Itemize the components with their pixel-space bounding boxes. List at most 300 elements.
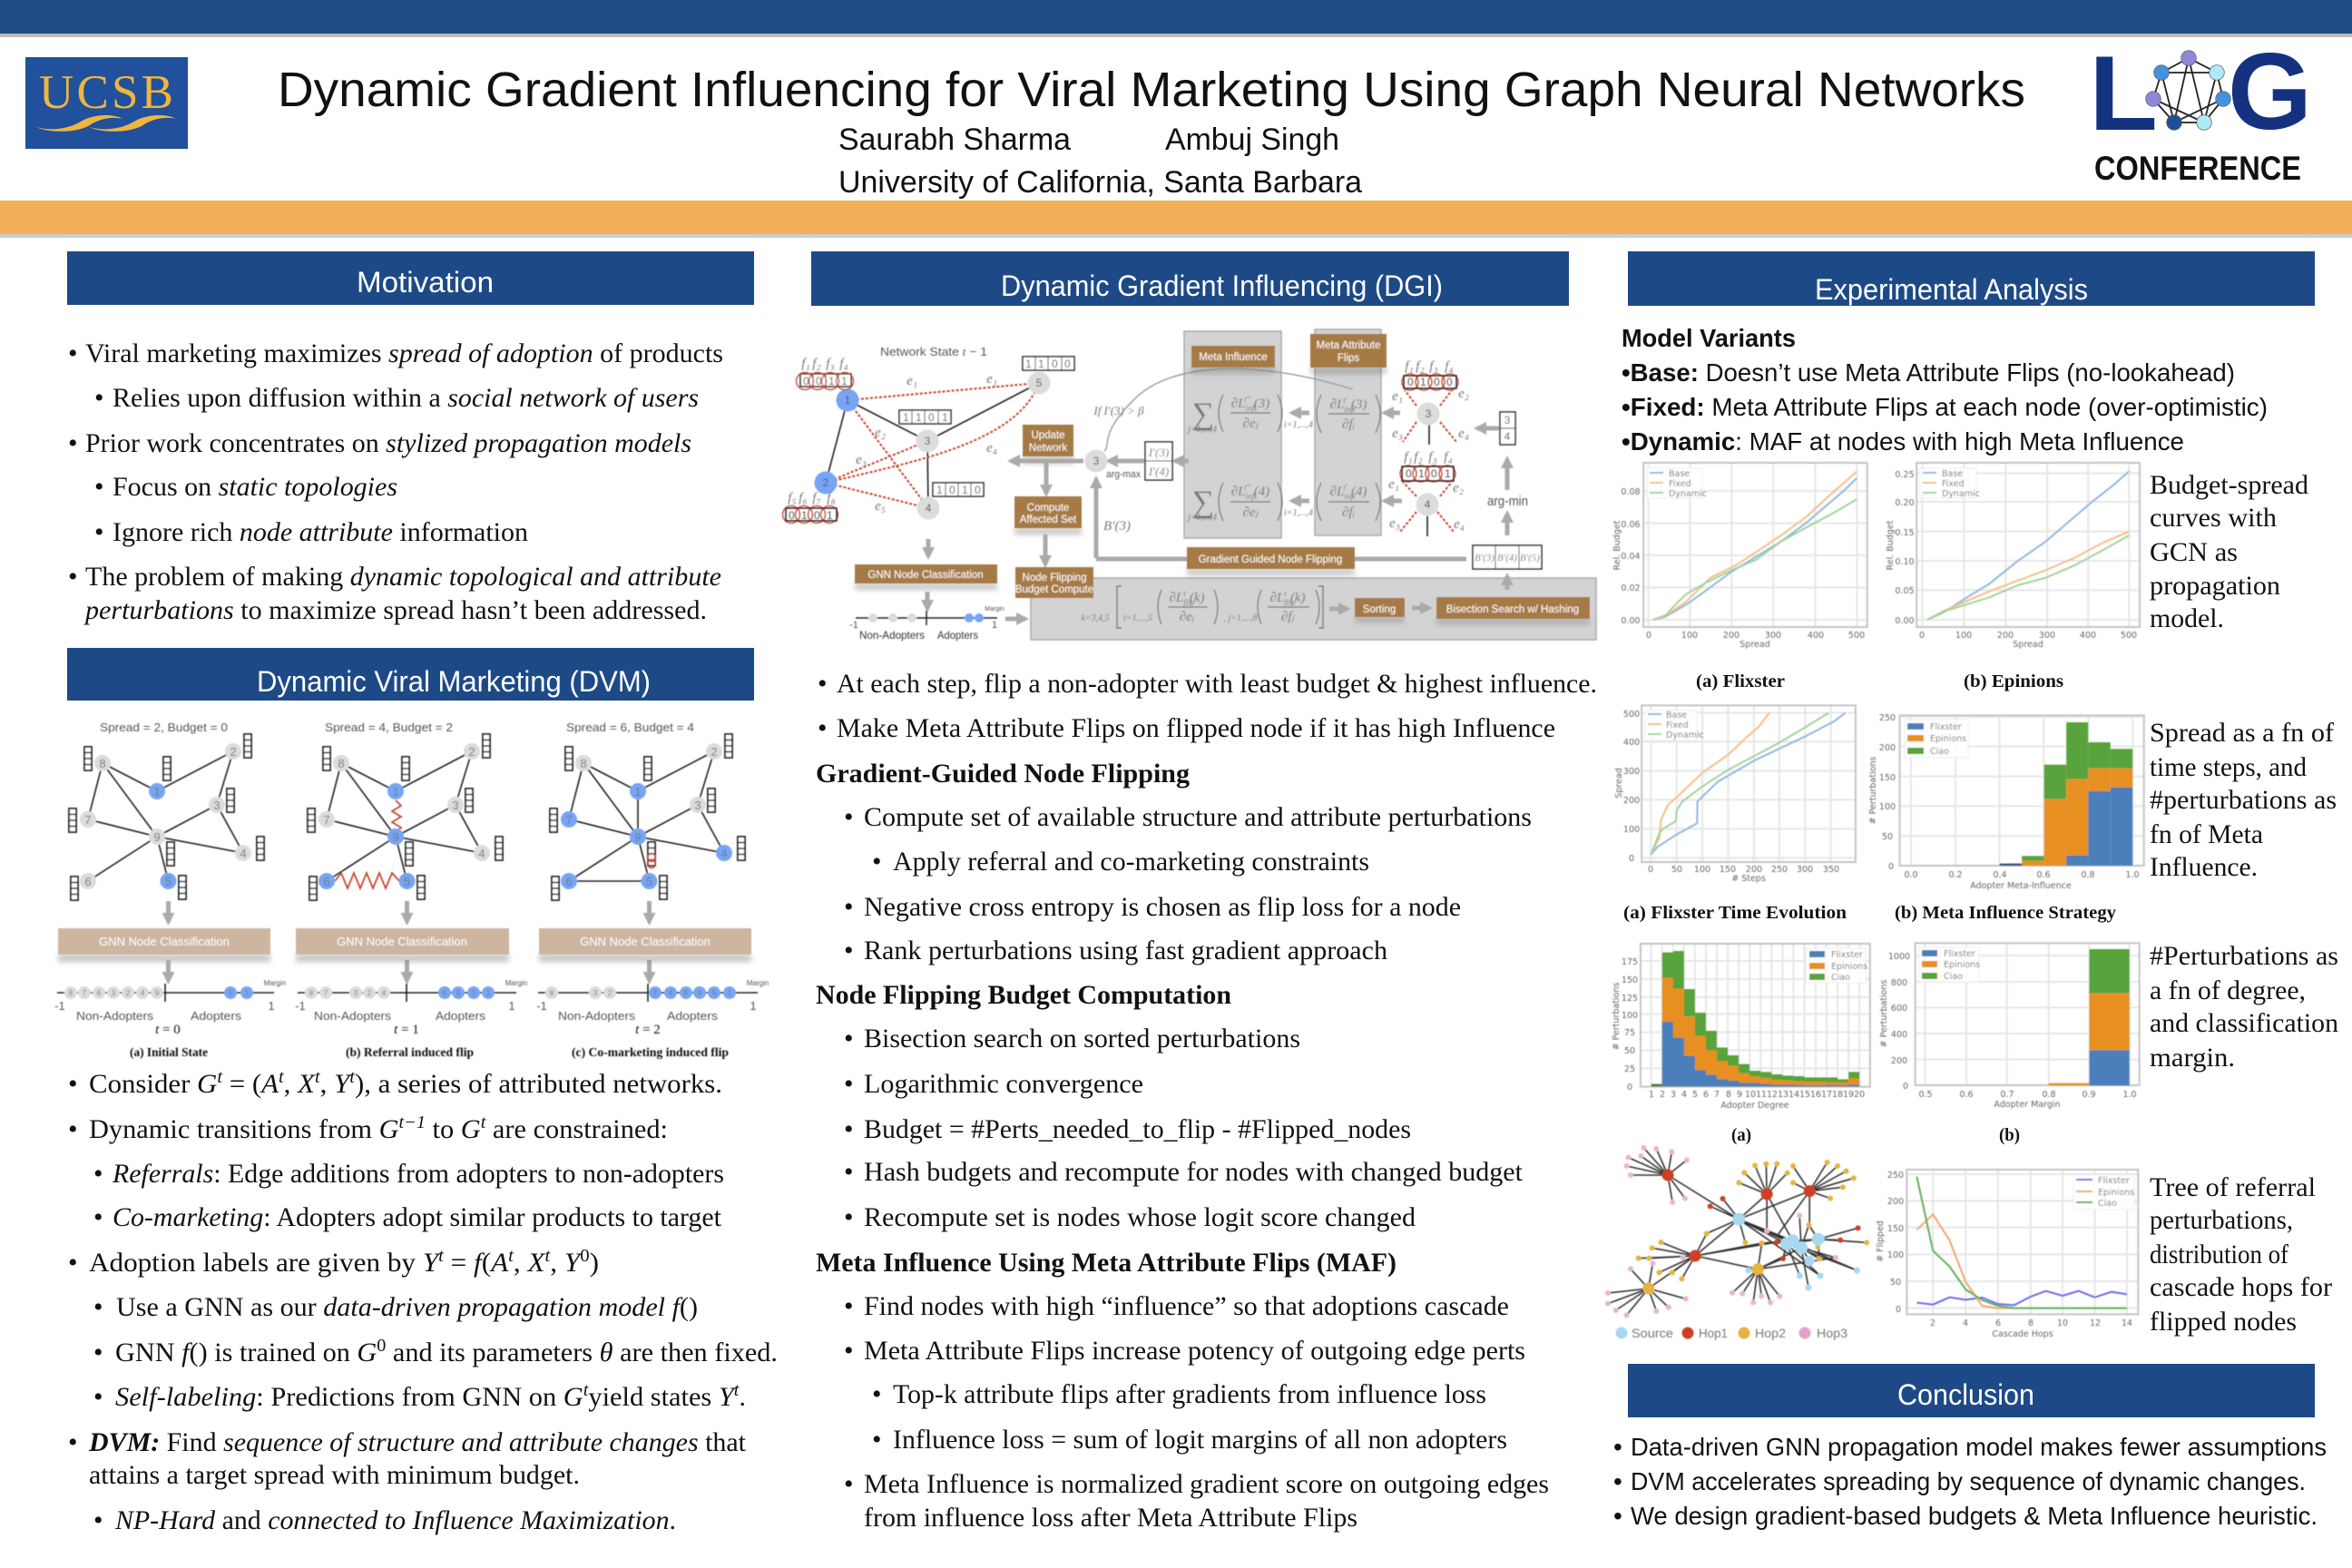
chart: cascade hops line chart: 12 xyxy=(2090,1318,2101,1328)
sub-figure: initial state: 9 xyxy=(153,830,161,844)
sub-figure: co-marketing induced flip: 9 xyxy=(634,830,642,844)
chart: meta influence strategy histogram: Epinions xyxy=(1930,734,1966,744)
chart: referral tree network: Hop2 xyxy=(1755,1326,1786,1340)
text block: motivation bullets: • xyxy=(94,517,104,547)
gradient guided flipping and budget row: ∂L xyxy=(1170,591,1183,605)
text block: DGI steps: Top-k attribute flips after gradients from influence loss xyxy=(893,1379,1486,1409)
text block: DVM bullets: θ are then fixed. xyxy=(600,1338,776,1367)
right-side candidate nodes: f₂ xyxy=(1414,450,1423,465)
text block: conclusion bullets: We design gradient-based budgets & Meta Influence heuristic. xyxy=(1631,1502,2318,1530)
right-side candidate nodes: 4 xyxy=(1504,430,1511,443)
sub-figure: referral induced flip: 5 xyxy=(472,989,476,997)
chart: perturbations by adopter degree: # Perturbations xyxy=(1612,983,1622,1050)
sub-figure: initial state: 4 xyxy=(240,847,247,860)
text block: DVM bullets: to xyxy=(426,1114,461,1144)
meta influence and attribute columns: t″ xyxy=(1245,395,1250,404)
chart: Flixster budget-spread: 0 xyxy=(1646,631,1651,641)
text block: DVM bullets: • xyxy=(93,1505,103,1535)
text block: DGI steps: Meta Influence is normalized gradient score on outgoing edges xyxy=(864,1469,1549,1499)
text block: DVM bullets: are constrained: xyxy=(485,1114,668,1144)
chart: Epinions budget-spread: Dynamic xyxy=(1942,489,1980,499)
GNN node classification and margin line: Adopters xyxy=(937,629,978,642)
update network and budget pipeline: Update xyxy=(1031,430,1065,441)
panel header: Dynamic Gradient Influencing: Dynamic Gradient Influencing (DGI) xyxy=(1001,270,1443,302)
text block: DVM bullets: Dynamic transitions from G xyxy=(89,1114,398,1144)
logo: LoG conference: G xyxy=(2228,31,2312,152)
chart: meta influence strategy histogram xyxy=(1868,713,2144,891)
text block: DVM bullets: f(A xyxy=(474,1248,507,1278)
meta influence and attribute columns: ∂L xyxy=(1231,485,1245,499)
text block: DVM bullets: t xyxy=(217,1067,223,1087)
network state graph: 1010 xyxy=(936,484,981,496)
sub-figure: initial state: 4 xyxy=(141,989,145,997)
chart: Epinions budget-spread: 300 xyxy=(2039,631,2055,641)
sub-figure: co-marketing induced flip: 2 xyxy=(608,989,612,997)
chart: Epinions budget-spread: Rel. Budget xyxy=(1886,520,1896,570)
sub-figure: initial state xyxy=(54,720,286,1060)
right-side candidate nodes: 3 xyxy=(1426,407,1432,420)
chart: perturbations by adopter margin: 1000 xyxy=(1888,952,1910,962)
side note: budget-spread curves: curves with xyxy=(2150,503,2277,533)
chart: perturbations by adopter degree: 14 xyxy=(1788,1090,1799,1100)
chart: perturbations by adopter degree: Ciao xyxy=(1831,973,1850,983)
text block: motivation bullets: • xyxy=(94,472,104,502)
chart: cascade hops line chart: 8 xyxy=(2028,1318,2034,1328)
network state graph: e₂ xyxy=(875,426,886,440)
text block: DGI steps: Apply referral and co-marketing constraints xyxy=(893,847,1369,877)
side note: budget-spread curves: model. xyxy=(2150,603,2224,633)
authors: University of California, Santa Barbara xyxy=(838,165,1362,200)
network state graph: Network State t − 1 xyxy=(880,345,987,358)
chart: referral tree network: Hop1 xyxy=(1699,1326,1728,1340)
chart: meta influence strategy histogram: 0.6 xyxy=(2036,870,2051,880)
chart: Epinions budget-spread: Fixed xyxy=(1942,479,1965,489)
sub-figure: initial state: (a) Initial State xyxy=(130,1046,208,1060)
text block: DVM bullets: • xyxy=(93,1292,103,1322)
chart: perturbations by adopter margin: 0.5 xyxy=(1918,1090,1933,1100)
text block: DVM bullets: , xyxy=(284,1069,298,1099)
panel header: Motivation xyxy=(67,251,754,305)
chart: Flixster budget-spread: 0.08 xyxy=(1621,487,1641,497)
update network and budget pipeline: If I′(3) > β xyxy=(1093,404,1144,417)
chart: perturbations by adopter margin: 0 xyxy=(1903,1082,1908,1092)
network state graph: e₄ xyxy=(986,441,997,456)
text block: motivation bullets: Focus on static topologies xyxy=(113,472,397,502)
text block: DVM bullets: • xyxy=(68,1069,78,1099)
gradient guided flipping and budget row: Sorting xyxy=(1363,604,1396,615)
chart: Flixster budget-spread: 300 xyxy=(1765,631,1781,641)
text block: DVM bullets: • xyxy=(68,1114,78,1144)
authors xyxy=(838,122,1362,200)
chart: cascade hops line chart: 100 xyxy=(1887,1250,1904,1260)
chart: perturbations by adopter degree: 150 xyxy=(1622,975,1638,985)
side note: referral tree xyxy=(2150,1172,2332,1337)
meta influence and attribute columns: ∂L xyxy=(1231,397,1245,411)
side note: spread over time: Spread as a fn of xyxy=(2150,718,2334,748)
chart: perturbations by adopter margin: 0.8 xyxy=(2042,1090,2056,1100)
text block: DVM bullets xyxy=(68,1067,778,1535)
network state graph: 3 xyxy=(925,435,931,447)
side note: perturbations by degree: and classification xyxy=(2150,1008,2338,1038)
chart: cascade hops line chart: 4 xyxy=(1963,1318,1968,1328)
chart: Flixster budget-spread: Base xyxy=(1669,469,1690,479)
title: Dynamic Gradient Influencing for Viral Marketing Using Graph Neural Networks xyxy=(278,63,2025,117)
text block: DVM bullets: GNN f() is trained on G xyxy=(115,1338,377,1367)
text block: DGI steps: • xyxy=(844,802,854,832)
network state graph: f₂ xyxy=(812,357,821,371)
sub-figure: co-marketing induced flip: 6 xyxy=(684,989,689,997)
sub-figure: referral induced flip: 5 xyxy=(404,875,410,888)
text block: DGI steps: • xyxy=(844,1291,854,1321)
sub-figure: referral induced flip: 1 xyxy=(508,999,515,1013)
text block: model variants: •Dynamic: MAF at nodes with high Meta Influence xyxy=(1622,427,2184,456)
gradient guided flipping and budget row: i=1,...,5 xyxy=(1123,613,1152,623)
meta influence and attribute columns: ∂fᵢ xyxy=(1342,505,1355,520)
sub-figure: initial state: GNN Node Classification xyxy=(99,935,230,948)
grey panels xyxy=(1031,329,1596,640)
sub-figure: co-marketing induced flip: 1 xyxy=(634,785,642,799)
chart: perturbations by adopter degree: 123456789 xyxy=(1649,1090,1742,1100)
network state graph: f₄ xyxy=(839,357,848,371)
panel header: Experimental Analysis xyxy=(1628,251,2315,306)
meta influence and attribute columns: ∂L xyxy=(1330,397,1344,412)
right-side candidate nodes: 3 xyxy=(1504,414,1511,426)
text block: DGI steps: • xyxy=(872,847,882,877)
chart: Flixster time evolution: 200 xyxy=(1623,796,1640,806)
sub-figure: co-marketing induced flip: t = 2 xyxy=(635,1023,661,1037)
text block: DVM bullets: t xyxy=(734,1380,740,1400)
text block: model variants: •Base: Doesn’t use Meta Attribute Flips (no-lookahead) xyxy=(1622,358,2235,387)
sub-figure: co-marketing induced flip: 5 xyxy=(712,989,717,997)
right-side candidate nodes: e₄ xyxy=(1458,426,1469,441)
text block: DVM bullets: , xyxy=(550,1248,564,1278)
chart: perturbations by adopter margin: 400 xyxy=(1891,1030,1907,1040)
gradient guided flipping and budget row: flip xyxy=(1183,598,1195,607)
text block: DGI steps: • xyxy=(844,1202,854,1232)
side note: perturbations by degree xyxy=(2150,941,2338,1073)
update network and budget pipeline: Network xyxy=(1029,443,1067,454)
text block: DGI steps: Meta Attribute Flips increase potency of outgoing edge perts xyxy=(864,1336,1525,1366)
side note: perturbations by degree: #Perturbations as xyxy=(2150,941,2338,971)
network state graph: 2 xyxy=(823,476,829,489)
gradient guided flipping and budget row: B′(3) xyxy=(1475,553,1494,564)
chart: cascade hops line chart: 2 xyxy=(1930,1318,1936,1328)
meta influence and attribute columns: (3) xyxy=(1254,397,1269,411)
sub-figure: initial state: t = 0 xyxy=(155,1023,181,1037)
chart: perturbations by adopter degree: 13 xyxy=(1778,1090,1788,1100)
sub-figure: co-marketing induced flip: 8 xyxy=(580,757,587,770)
text block: model variants: Model Variants xyxy=(1622,324,1796,352)
meta influence and attribute columns: t′ xyxy=(1343,396,1348,405)
sub-figure: initial state: 6 xyxy=(84,875,92,888)
chart: perturbations by adopter degree: 18 xyxy=(1832,1090,1843,1100)
sub-figure: referral induced flip: 4 xyxy=(478,847,485,860)
sub-figure: initial state: 1 xyxy=(245,989,250,997)
update network and budget pipeline: Affected Set xyxy=(1020,514,1077,525)
sub-figure: referral induced flip: -1 xyxy=(295,999,306,1013)
GNN node classification and margin line: 1 xyxy=(992,620,997,631)
text block: DVM bullets: G xyxy=(461,1114,481,1144)
chart: perturbations by adopter margin: 0.7 xyxy=(2000,1090,2014,1100)
meta influence and attribute columns: i=1,...,4 xyxy=(1284,420,1313,430)
meta influence and attribute columns: Flips xyxy=(1338,353,1359,364)
chart: Flixster budget-spread: 100 xyxy=(1681,631,1698,641)
side note: referral tree: distribution of xyxy=(2150,1240,2288,1269)
text block: DGI steps: Influence loss = sum of logit margins of all non adopters xyxy=(893,1425,1507,1455)
chart: perturbations by adopter margin: Epinions xyxy=(1944,960,1980,970)
chart: cascade hops line chart: 250 xyxy=(1887,1171,1904,1181)
sub-figure: initial state: 8 xyxy=(99,757,106,770)
sub-figure: co-marketing induced flip: 1 xyxy=(728,989,732,997)
text block: DGI steps: • xyxy=(844,1469,854,1499)
text block: DVM bullets: NP-Hard and connected to Influence Maximization. xyxy=(114,1505,676,1535)
text block: DVM bullets: and its parameters xyxy=(386,1338,600,1367)
network state graph: e₁ xyxy=(906,374,917,388)
chart: Flixster time evolution: 250 xyxy=(1771,865,1788,875)
chart: meta influence strategy histogram: Flixster xyxy=(1930,722,1962,732)
chart: cascade hops line chart xyxy=(1876,1170,2138,1339)
sub-figure: referral induced flip: t = 1 xyxy=(394,1023,419,1037)
text block: motivation bullets: The problem of making dynamic topological and attribute xyxy=(85,562,721,592)
meta influence and attribute columns: ∑ xyxy=(1192,397,1214,431)
gradient guided flipping and budget row: ∂L xyxy=(1270,591,1284,605)
chart: meta influence strategy histogram: # Perturbations xyxy=(1868,757,1878,824)
figure: DVM three-state diagram xyxy=(54,720,769,1060)
text block: DVM bullets: DVM: Find sequence of structure and attribute changes that xyxy=(88,1427,747,1457)
panel header: Conclusion xyxy=(1628,1364,2315,1417)
panel header: Experimental Analysis: Experimental Analysis xyxy=(1815,273,2088,306)
right-side candidate nodes: f₄ xyxy=(1444,450,1453,465)
sub-figure: co-marketing induced flip: 5 xyxy=(646,875,652,888)
chart: Epinions budget-spread: Spread xyxy=(2013,640,2043,650)
text block: motivation bullets xyxy=(68,338,723,625)
text block: DVM bullets: • xyxy=(68,1248,78,1278)
text block: DVM bullets: t xyxy=(349,1067,355,1087)
chart: Flixster time evolution: 200 xyxy=(1746,865,1762,875)
side note: referral tree: Tree of referral xyxy=(2150,1172,2316,1202)
sub-figure: co-marketing induced flip: 4 xyxy=(669,989,673,997)
chart: referral tree network xyxy=(1608,1148,1867,1340)
heading: gradient-guided node flipping: Gradient-Guided Node Flipping xyxy=(816,759,1190,789)
gradient guided flipping and budget row: (k) xyxy=(1190,591,1204,605)
right-side candidate nodes: f₃ xyxy=(1428,450,1437,465)
text block: DGI steps: • xyxy=(844,892,854,922)
right-side candidate nodes: e₃ xyxy=(1389,516,1400,531)
right-side candidate nodes: 4 xyxy=(1425,498,1431,511)
update network and budget pipeline: Budget Compute xyxy=(1015,584,1093,595)
right-side candidate nodes: e₂ xyxy=(1453,481,1464,495)
text block: DGI steps: Compute set of available structure and attribute perturbations xyxy=(864,802,1532,832)
text block: DVM bullets: • xyxy=(93,1159,103,1189)
GNN node classification and margin line: GNN Node Classification xyxy=(867,570,984,581)
captions: first chart row xyxy=(1696,671,2063,691)
text block: DVM bullets: • xyxy=(93,1338,103,1367)
sub-figure: initial state: -1 xyxy=(54,999,65,1013)
sub-figure: initial state: 7 xyxy=(84,813,92,827)
chart: cascade hops line chart: Ciao xyxy=(2098,1199,2117,1209)
sub-figure: referral induced flip: 7 xyxy=(324,989,328,997)
chart: referral tree network: Hop3 xyxy=(1817,1326,1847,1340)
update network and budget pipeline: I′(3) xyxy=(1148,446,1169,459)
chart: perturbations by adopter margin: 800 xyxy=(1891,978,1907,988)
chart: Flixster time evolution: Fixed xyxy=(1666,720,1689,730)
GNN node classification and margin line: -1 xyxy=(849,620,858,631)
sub-figure: referral induced flip: 6 xyxy=(323,875,330,888)
chart: perturbations by adopter degree: 20 xyxy=(1854,1090,1865,1100)
chart: cascade hops line chart: 6 xyxy=(1995,1318,2001,1328)
chart: Flixster time evolution: Spread xyxy=(1614,768,1624,799)
text block: DVM bullets: Y xyxy=(564,1248,583,1278)
gradient guided flipping and budget row: , j=1,...,8 xyxy=(1223,613,1258,623)
logo: LoG conference: CONFERENCE xyxy=(2094,150,2301,187)
network state graph: e₃ xyxy=(856,453,867,467)
sub-figure: co-marketing induced flip: Non-Adopters xyxy=(558,1009,636,1023)
chart: perturbations by adopter degree: 16 xyxy=(1810,1090,1821,1100)
update network and budget pipeline: I′(4) xyxy=(1148,465,1169,478)
gradient guided flipping and budget row: flip xyxy=(1284,598,1296,607)
chart: perturbations by adopter degree: 17 xyxy=(1821,1090,1832,1100)
meta influence and attribute columns: (4) xyxy=(1254,485,1269,499)
panel header: Motivation: Motivation xyxy=(357,266,494,299)
right-side candidate nodes: e₁ xyxy=(1388,477,1399,492)
side note: budget-spread curves: propagation xyxy=(2150,571,2280,601)
text block: DGI steps: • xyxy=(844,1336,854,1366)
text block: conclusion bullets xyxy=(1613,1433,2327,1530)
chart: Flixster time evolution: 100 xyxy=(1623,825,1640,835)
captions: first chart row: (b) Epinions xyxy=(1964,671,2063,691)
sub-figure: referral induced flip: 3 xyxy=(354,989,358,997)
text block: DVM bullets: 0 xyxy=(377,1336,386,1356)
text block: conclusion bullets: • xyxy=(1613,1467,1622,1495)
sub-figure: co-marketing induced flip: 7 xyxy=(565,813,573,827)
network state graph: f₁ xyxy=(801,357,810,371)
gradient guided flipping and budget row: k=3,4,5 xyxy=(1081,613,1110,623)
sub-figure: initial state: 7 xyxy=(83,989,87,997)
sub-figure: referral induced flip: Adopters xyxy=(436,1009,486,1023)
text block: model variants xyxy=(1622,324,2268,456)
chart: Flixster time evolution: Dynamic xyxy=(1666,730,1704,740)
network state graph xyxy=(782,345,1458,523)
chart: perturbations by adopter degree: 75 xyxy=(1624,1028,1635,1038)
text block: conclusion bullets: Data-driven GNN propagation model makes fewer assumptions xyxy=(1631,1433,2327,1461)
chart: Epinions budget-spread: 0.25 xyxy=(1895,470,1915,480)
text block: conclusion bullets: • xyxy=(1613,1433,1622,1461)
panel header: Dynamic Viral Marketing: Dynamic Viral Marketing (DVM) xyxy=(257,665,651,698)
chart: Flixster budget-spread: Fixed xyxy=(1669,479,1691,489)
sub-figure: referral induced flip: Spread = 4, Budget = 2 xyxy=(325,720,453,734)
right-side candidate nodes: e₁ xyxy=(1392,389,1403,404)
text block: DGI steps: • xyxy=(844,1069,854,1099)
text block: DVM bullets: • xyxy=(68,1427,78,1457)
chart: Flixster time evolution: 150 xyxy=(1720,865,1736,875)
gradient guided flipping and budget row: Gradient Guided Node Flipping xyxy=(1199,554,1342,565)
chart: Flixster budget-spread: Spread xyxy=(1740,640,1770,650)
text block: DGI steps: Negative cross entropy is chosen as flip loss for a node xyxy=(864,892,1461,922)
sub-figure: co-marketing induced flip: 3 xyxy=(694,799,701,812)
chart: cascade hops line chart: 14 xyxy=(2122,1318,2132,1328)
logo: LoG conference: L xyxy=(2089,34,2158,152)
chart: cascade hops line chart: 50 xyxy=(1890,1278,1901,1288)
meta influence and attribute columns: j=1,...,4 xyxy=(1186,513,1217,523)
text block: DVM bullets: • xyxy=(93,1202,103,1232)
sub-figure: initial state: 1 xyxy=(153,785,161,799)
update network and budget pipeline: B′(3) xyxy=(1103,519,1131,534)
text block: DGI steps: Make Meta Attribute Flips on flipped node if it has high Influence xyxy=(837,713,1555,743)
side note: perturbations by degree: margin. xyxy=(2150,1043,2235,1073)
captions: third chart row xyxy=(1731,1125,2020,1145)
text block: motivation bullets: • xyxy=(68,338,78,368)
chart: Flixster budget-spread: 500 xyxy=(1848,631,1865,641)
text block: motivation bullets: Viral marketing maximizes spread of adoption of products xyxy=(85,338,723,368)
chart: Flixster time evolution: Base xyxy=(1666,710,1687,720)
sub-figure: referral induced flip: 3 xyxy=(452,799,459,812)
meta influence and attribute columns: ∂fᵢ xyxy=(1342,417,1355,432)
chart: Flixster budget-spread: Dynamic xyxy=(1669,489,1707,499)
meta influence and attribute columns: ∑ xyxy=(1192,485,1214,519)
update network and budget pipeline: 3 xyxy=(1093,455,1100,467)
sub-figure: referral induced flip: Non-Adopters xyxy=(314,1009,392,1023)
chart: Flixster budget-spread: 0.04 xyxy=(1621,552,1641,562)
text block: motivation bullets: Prior work concentrates on stylized propagation models xyxy=(85,428,691,458)
chart: meta influence strategy histogram: 50 xyxy=(1882,832,1893,842)
sub-figure: co-marketing induced flip: 9 xyxy=(698,989,702,997)
captions: second chart row xyxy=(1623,903,2116,923)
sub-figure: initial state: 5 xyxy=(229,989,233,997)
chart: Epinions budget-spread: 500 xyxy=(2121,631,2137,641)
text block: DGI steps: • xyxy=(872,1379,882,1409)
text block: DVM bullets: Y xyxy=(719,1382,737,1412)
text block: motivation bullets: • xyxy=(68,428,78,458)
right-side candidate nodes: e₂ xyxy=(1458,387,1469,401)
chart: meta influence strategy histogram: 150 xyxy=(1879,773,1896,783)
network state graph: 4 xyxy=(926,502,932,514)
update network and budget pipeline: Compute xyxy=(1027,503,1069,514)
chart: meta influence strategy histogram: 0 xyxy=(1888,862,1894,872)
chart: Flixster budget-spread: 0.02 xyxy=(1621,583,1641,593)
sub-figure: co-marketing induced flip: GNN Node Classification xyxy=(580,935,710,948)
sub-figure: referral induced flip: Margin xyxy=(505,979,527,987)
sub-figure: initial state: 3 xyxy=(112,989,116,997)
text block: DVM bullets: Referrals: Edge additions from adopters to non-adopters xyxy=(112,1159,724,1189)
text block: DVM bullets: t xyxy=(279,1067,284,1087)
text block: DVM bullets: t xyxy=(545,1246,551,1266)
top blue banner xyxy=(0,0,2352,37)
sub-figure: co-marketing induced flip: Spread = 6, Budget = 4 xyxy=(566,720,694,734)
heading: meta influence: Meta Influence Using Meta Attribute Flips (MAF) xyxy=(816,1248,1396,1278)
captions: second chart row: (b) Meta Influence Strategy xyxy=(1895,903,2116,923)
chart: meta influence strategy histogram: 1.0 xyxy=(2125,870,2140,880)
text block: DVM bullets: 0 xyxy=(580,1246,590,1266)
text block: DVM bullets: . xyxy=(739,1382,746,1412)
sub-figure: referral induced flip: 2 xyxy=(468,745,475,759)
chart: perturbations by adopter degree: 19 xyxy=(1843,1090,1854,1100)
sub-figure: co-marketing induced flip: 2 xyxy=(710,745,718,759)
chart: Flixster time evolution: # Steps xyxy=(1731,874,1766,884)
sub-figure: initial state: 5 xyxy=(165,875,172,888)
chart: perturbations by adopter margin: 200 xyxy=(1891,1056,1907,1066)
sub-figure: initial state: Adopters xyxy=(191,1009,242,1023)
meta influence and attribute columns: ∂L xyxy=(1330,485,1344,499)
network state graph: f₈ xyxy=(827,491,836,505)
chart: cascade hops line chart: Flixster xyxy=(2098,1176,2130,1186)
text block: conclusion bullets: DVM accelerates spreading by sequence of dynamic changes. xyxy=(1631,1467,2306,1495)
text block: DVM bullets: , xyxy=(514,1248,527,1278)
chart: perturbations by adopter margin xyxy=(1879,943,2140,1110)
side note: referral tree: cascade hops for xyxy=(2150,1272,2332,1302)
meta influence and attribute columns: infl xyxy=(1245,492,1257,501)
chart: perturbations by adopter degree: Adopter Degree xyxy=(1720,1101,1789,1111)
chart: perturbations by adopter margin: # Perturbations xyxy=(1879,980,1889,1047)
